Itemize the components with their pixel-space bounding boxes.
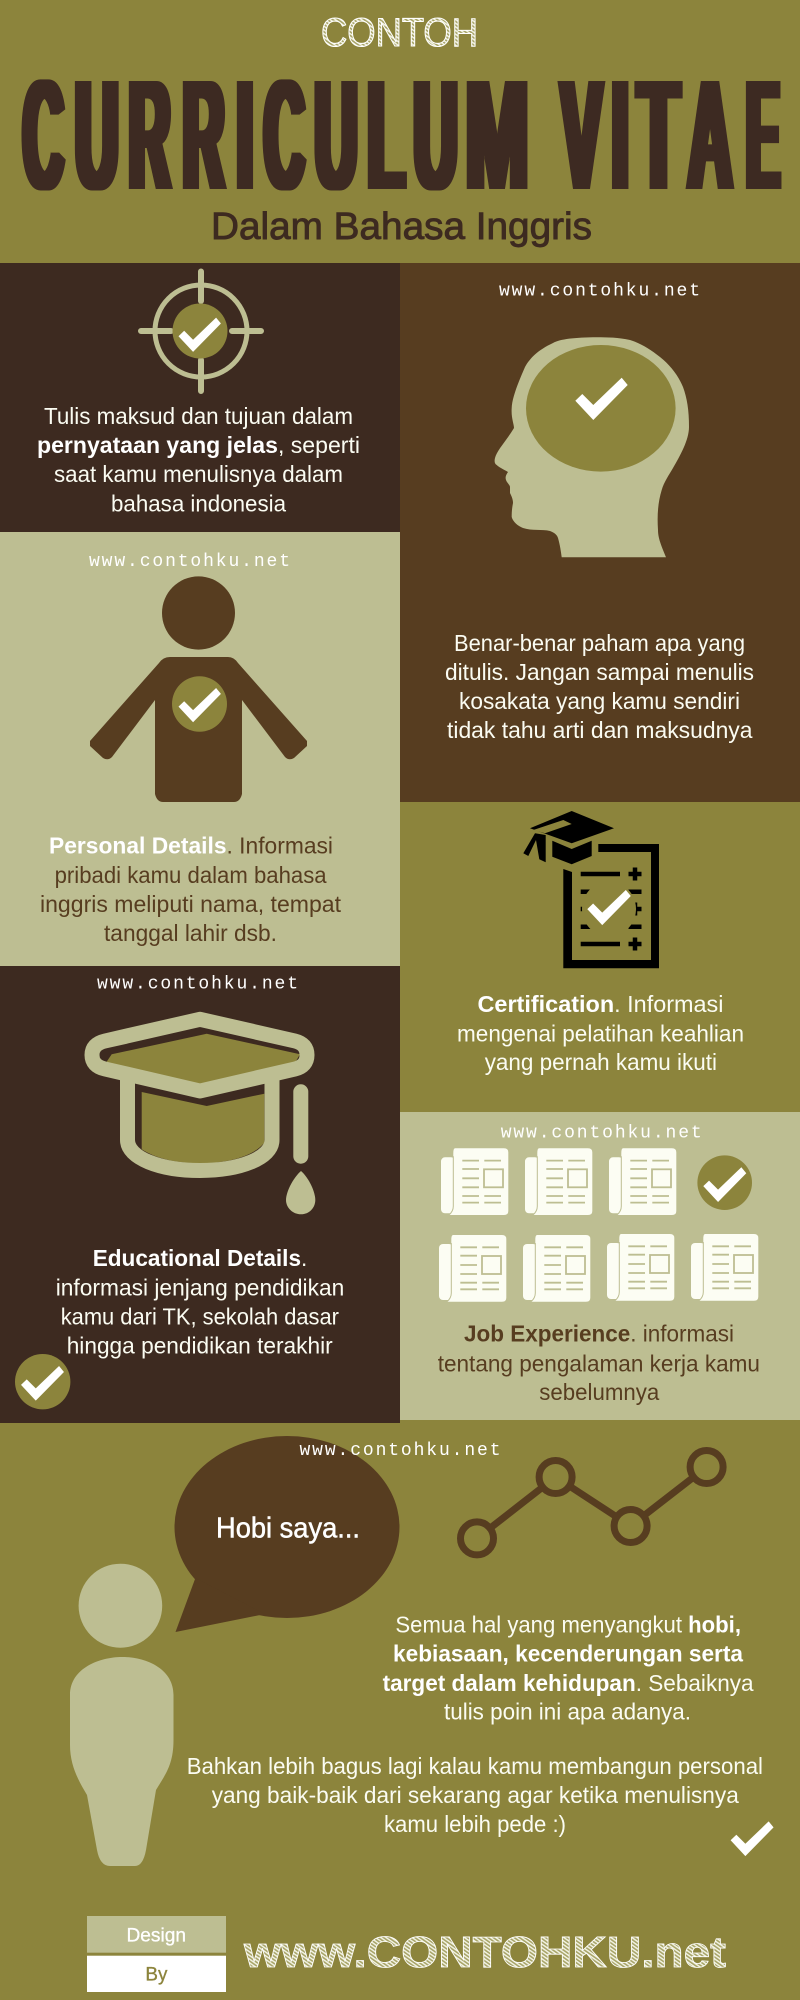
footer site url: www.CONTOHKU.net xyxy=(243,1928,726,1977)
hobbies text: target dalam kehidupan. Sebaiknya xyxy=(383,1670,754,1696)
title: A xyxy=(688,48,732,223)
title: T xyxy=(638,48,679,223)
objective text: pernyataan yang jelas, seperti xyxy=(37,432,360,458)
understanding text xyxy=(445,630,754,743)
badge: By: By xyxy=(145,1964,168,1986)
certification text xyxy=(457,991,744,1075)
title: U xyxy=(75,48,118,223)
hobbies text: kebiasaan, kecenderungan serta xyxy=(393,1641,743,1667)
title: V xyxy=(561,48,602,223)
hobbies text: tulis poin ini apa adanya. xyxy=(444,1699,691,1725)
title: R xyxy=(183,48,224,223)
subtitle: Dalam Bahasa Inggris xyxy=(211,206,592,248)
personal details text: tanggal lahir dsb. xyxy=(104,920,277,946)
panel: educational details xyxy=(0,966,400,1423)
hobbies text: Semua hal yang menyangkut hobi, xyxy=(395,1612,741,1638)
educational details text xyxy=(56,1245,344,1358)
objective text: Tulis maksud dan tujuan dalam xyxy=(44,403,353,429)
hobbies text xyxy=(383,1612,754,1725)
title: M xyxy=(466,48,528,223)
panel: job experience xyxy=(400,1112,800,1420)
icon: check badge xyxy=(15,1354,70,1409)
icon: check badge xyxy=(697,1155,752,1210)
understanding text: ditulis. Jangan sampai menulis xyxy=(445,659,754,685)
objective text: saat kamu menulisnya dalam xyxy=(54,461,343,487)
panel: certification xyxy=(400,802,800,1112)
icon: graduation cap xyxy=(92,1019,315,1214)
title: U xyxy=(315,48,357,223)
title: L xyxy=(368,48,405,223)
badge: By xyxy=(87,1956,226,1992)
certification text: Certification. Informasi xyxy=(478,991,724,1017)
job experience text: Job Experience. informasi xyxy=(464,1321,734,1347)
understanding text: tidak tahu arti dan maksudnya xyxy=(447,717,753,743)
personal details text: inggris meliputi nama, tempat xyxy=(40,891,342,917)
title: C xyxy=(264,48,304,223)
certification text: mengenai pelatihan keahlian xyxy=(457,1020,744,1046)
educational details text: hingga pendidikan terakhir xyxy=(67,1332,333,1358)
icon: check xyxy=(731,1821,774,1856)
icon: graduation cap and checklist xyxy=(523,811,659,968)
footer xyxy=(87,1916,726,1992)
watermark url: www.contohku.net xyxy=(89,552,290,572)
watermark url: www.contohku.net xyxy=(300,1441,500,1461)
badge: Design: Design xyxy=(126,1926,186,1947)
certification text: yang pernah kamu ikuti xyxy=(485,1049,717,1075)
understanding text: Benar-benar paham apa yang xyxy=(454,630,745,656)
understanding text: kosakata yang kamu sendiri xyxy=(459,688,740,714)
educational details text: Educational Details. xyxy=(93,1245,307,1271)
watermark url: www.contohku.net xyxy=(501,1124,702,1144)
panel: understanding xyxy=(400,263,800,802)
personal branding text: Bahkan lebih bagus lagi kalau kamu membangun personal xyxy=(187,1753,763,1779)
objective text xyxy=(37,403,360,516)
job experience text xyxy=(438,1321,760,1405)
personal details text: Personal Details. Informasi xyxy=(49,833,333,859)
job experience background xyxy=(400,1112,800,1420)
watermark url: www.contohku.net xyxy=(499,282,700,302)
personal branding text: yang baik-baik dari sekarang agar ketika menulisnya xyxy=(212,1782,739,1808)
understanding background xyxy=(400,263,800,802)
icon: newspapers xyxy=(439,1148,758,1302)
title: I xyxy=(237,48,253,223)
educational details background xyxy=(0,966,400,1423)
objective background xyxy=(0,263,400,532)
header background xyxy=(0,0,800,263)
panel: personal details xyxy=(0,532,400,966)
title: R xyxy=(129,48,170,223)
title: C xyxy=(23,48,63,223)
personal details text xyxy=(40,833,342,946)
personal branding text xyxy=(187,1753,763,1837)
panel: hobbies xyxy=(0,1423,800,2000)
icon: head with check xyxy=(495,337,689,557)
watermark url: www.contohku.net xyxy=(97,974,298,994)
title: U xyxy=(414,48,457,223)
badge: Design xyxy=(87,1916,226,1953)
icon: person with check xyxy=(90,576,307,802)
label: CONTOH: CONTOH xyxy=(321,11,478,55)
icon: person silhouette xyxy=(70,1564,174,1866)
title: I xyxy=(612,48,628,223)
header xyxy=(0,0,800,263)
speech bubble: Hobi saya... xyxy=(216,1513,360,1545)
personal details background xyxy=(0,532,400,966)
panel: objective xyxy=(0,263,400,532)
objective text: bahasa indonesia xyxy=(111,490,286,516)
educational details text: informasi jenjang pendidikan xyxy=(56,1274,344,1300)
personal branding text: kamu lebih pede :) xyxy=(384,1811,566,1837)
hobbies background xyxy=(0,1423,800,2000)
icon: target with check xyxy=(141,272,261,391)
job experience text: sebelumnya xyxy=(539,1379,659,1405)
speech bubble xyxy=(174,1436,400,1632)
icon: line chart xyxy=(460,1450,723,1555)
job experience text: tentang pengalaman kerja kamu xyxy=(438,1351,760,1377)
certification background xyxy=(400,802,800,1112)
personal details text: pribadi kamu dalam bahasa xyxy=(55,862,327,888)
educational details text: kamu dari TK, sekolah dasar xyxy=(61,1303,339,1329)
